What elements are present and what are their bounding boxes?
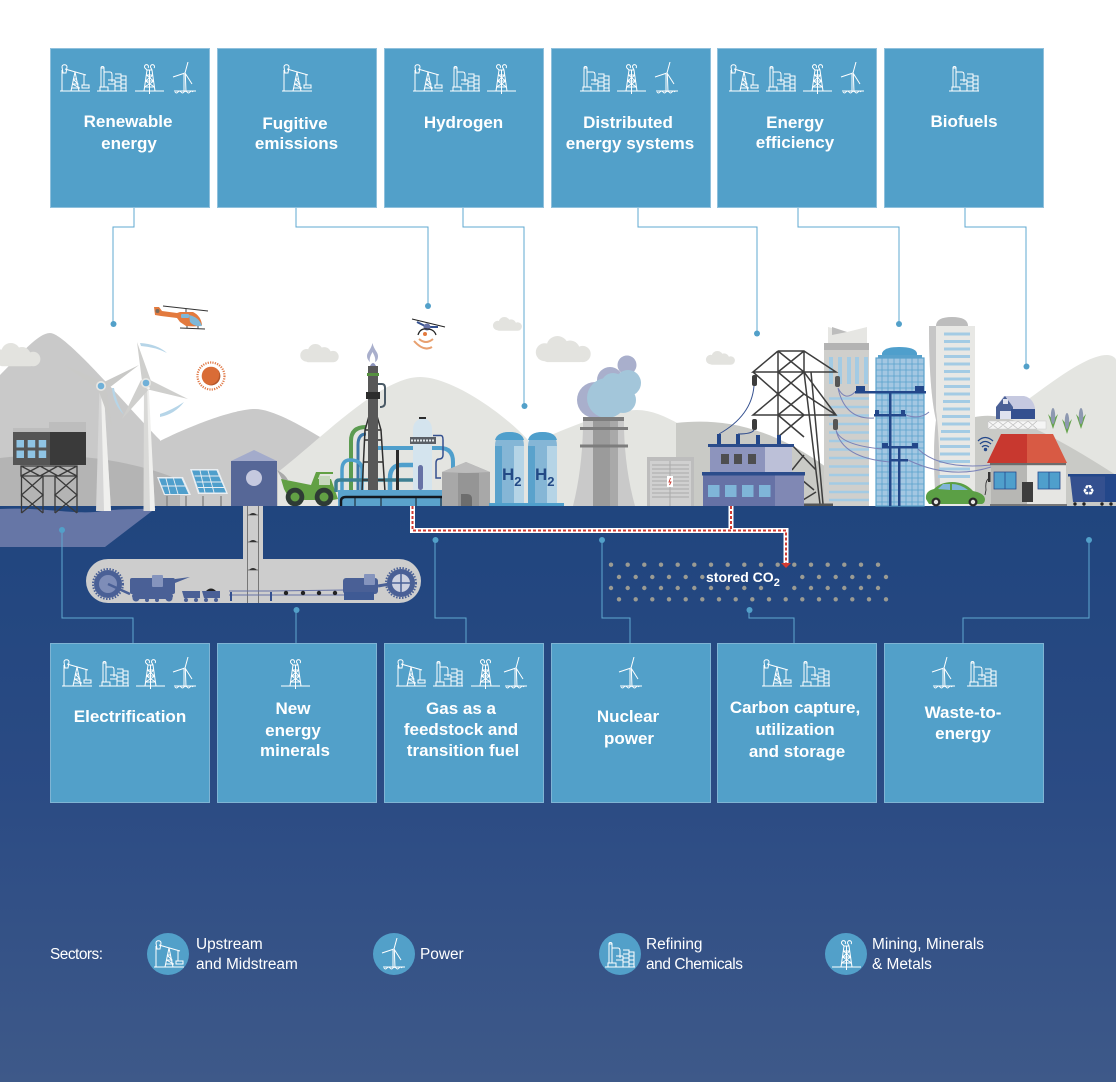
card: hydrogen [384, 48, 544, 208]
card: gas as a feedstock and transition fuel: transition fuel [407, 741, 519, 760]
card: nuclear power: Nuclear [597, 707, 660, 726]
flame [367, 343, 378, 362]
derrick [362, 416, 385, 492]
farmhouse and barn [978, 396, 1067, 506]
legend: mining, minerals and metals [825, 933, 984, 975]
left mining machine [93, 569, 220, 602]
card: biofuels [884, 48, 1044, 208]
card: new energy minerals: minerals [260, 741, 330, 760]
electrical cabinet [647, 457, 694, 506]
stored CO2 label: 2 [774, 577, 780, 589]
refinery [336, 343, 472, 506]
office towers [824, 317, 975, 506]
card: distributed energy systems: Distributed [583, 113, 673, 132]
legend: refining and chemicals: and Chemicals [646, 956, 743, 973]
card: energy efficiency [718, 48, 876, 208]
card: gas as a feedstock and transition fuel: Gas as a [426, 699, 497, 718]
solar panels [157, 469, 228, 506]
transmission pylon [753, 351, 836, 506]
stored CO2 reservoir dots [609, 562, 888, 602]
legend: mining, minerals and metals: & Metals [872, 956, 932, 973]
card: fugitive emissions: emissions [255, 134, 338, 153]
storage silo [442, 462, 490, 506]
drone [412, 319, 445, 349]
blue tower [876, 347, 924, 506]
card: nuclear power [552, 644, 710, 802]
recycling bin [1068, 474, 1116, 506]
CO2 storage pipeline [412, 506, 791, 568]
wind turbines [64, 342, 188, 511]
card: carbon capture, utilization and storage [718, 644, 876, 802]
electric car [926, 472, 990, 506]
legend: power [373, 933, 464, 975]
legend: refining and chemicals [599, 933, 743, 975]
card: fugitive emissions: Fugitive [262, 114, 328, 133]
mining truck [277, 470, 338, 506]
connector end dots [59, 303, 1092, 613]
offshore platform [13, 422, 86, 513]
legend: upstream and midstream: and Midstream [196, 956, 298, 973]
hydrogen tanks: H [535, 465, 547, 484]
sun [198, 362, 224, 390]
hydrogen tanks: 2 [547, 474, 555, 489]
conveyor belt [229, 590, 346, 601]
recycling bin: ♻ [1082, 483, 1095, 499]
card: distributed energy systems: energy systems [566, 134, 694, 153]
vessel [413, 418, 432, 497]
card: carbon capture, utilization and storage: utilization [755, 720, 835, 739]
utility poles and wires [836, 386, 991, 506]
card: renewable energy: energy [101, 134, 157, 153]
legend: refining and chemicals: Refining [646, 936, 702, 953]
processing building [231, 450, 277, 506]
card: biofuels: Biofuels [930, 112, 998, 131]
card: carbon capture, utilization and storage: and storage [749, 742, 845, 761]
card: new energy minerals: New [276, 699, 311, 718]
card: waste-to-energy: Waste-to- [925, 703, 1001, 722]
card: renewable energy [50, 48, 210, 208]
card: new energy minerals [218, 644, 376, 802]
H2 labels: 2 [514, 474, 522, 489]
background mountains [0, 333, 1116, 510]
card: new energy minerals: energy [265, 721, 321, 740]
barn [996, 396, 1035, 419]
card: waste-to-energy [884, 644, 1044, 802]
card: fugitive emissions [218, 48, 376, 208]
legend: mining, minerals and metals: Mining, Minerals [872, 936, 984, 953]
card: electrification [50, 644, 210, 802]
H2 labels: H [502, 465, 514, 484]
back tower [824, 327, 869, 506]
right mining machine [343, 568, 416, 600]
card: distributed energy systems [552, 48, 710, 208]
card: carbon capture, utilization and storage: Carbon capture, [730, 698, 860, 717]
legend: upstream and midstream [147, 933, 298, 975]
cooling tower with steam [573, 356, 641, 506]
card: waste-to-energy: energy [935, 724, 991, 743]
mine shaft and tunnel [86, 506, 421, 603]
card: energy efficiency: efficiency [756, 133, 835, 152]
legend: upstream and midstream: Upstream [196, 936, 263, 953]
card: gas as a feedstock and transition fuel [384, 644, 544, 802]
fence [988, 421, 1046, 429]
hydrogen tanks [489, 432, 564, 506]
white tower [929, 317, 975, 506]
underground and ground surface [0, 506, 1116, 1082]
sea [0, 508, 156, 547]
corn plants [1048, 408, 1086, 434]
sectors legend [50, 933, 984, 975]
legend: power: Power [420, 946, 464, 963]
legend title: Sectors: [50, 946, 103, 963]
substation [702, 375, 840, 506]
helicopter [154, 306, 208, 329]
flare stack [368, 366, 378, 492]
wifi symbol [978, 438, 993, 447]
card: renewable energy: Renewable [84, 112, 172, 131]
connector lines [62, 207, 1089, 643]
card: hydrogen: Hydrogen [424, 113, 503, 132]
stored CO2 label: stored CO [706, 569, 774, 585]
card: energy efficiency: Energy [766, 113, 824, 132]
card: nuclear power: power [604, 729, 654, 748]
clouds [0, 317, 735, 366]
card: electrification: Electrification [74, 707, 186, 726]
card: gas as a feedstock and transition fuel: feedstock and [404, 720, 518, 739]
